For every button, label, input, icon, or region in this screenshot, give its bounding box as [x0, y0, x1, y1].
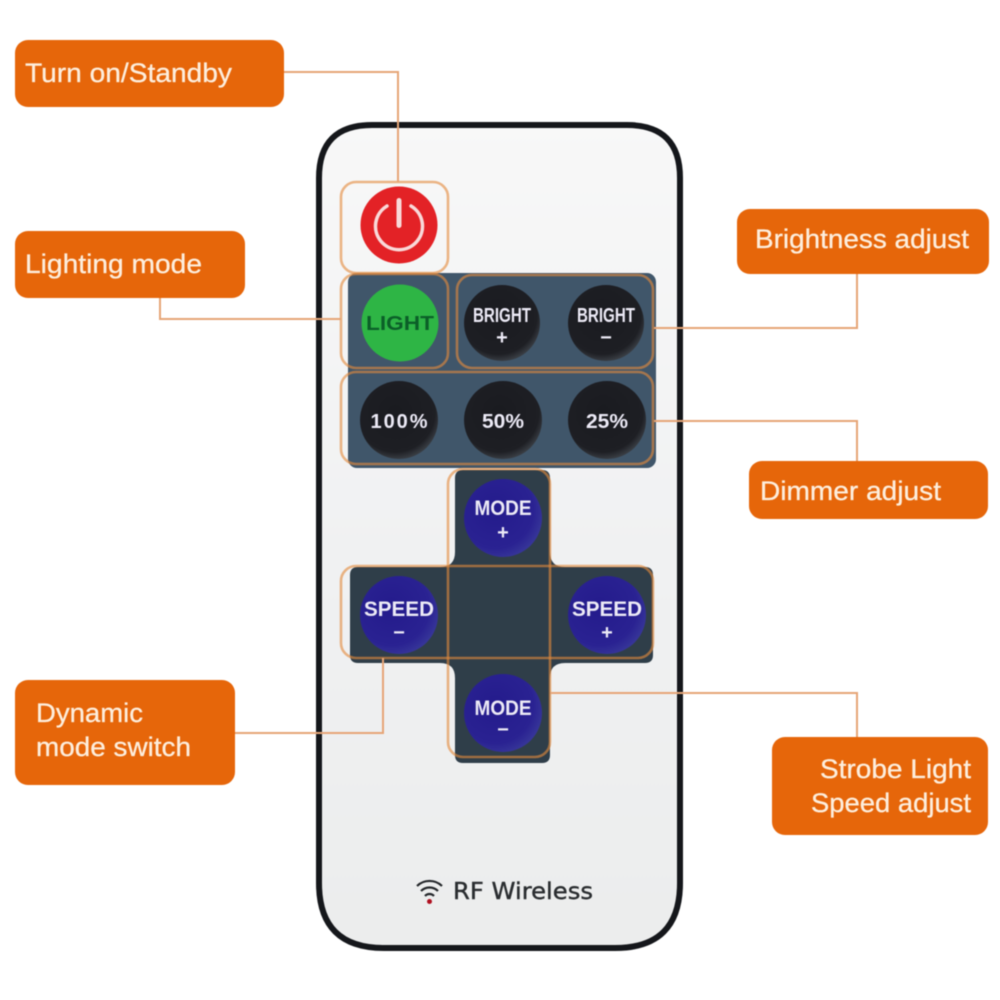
button: 50%: 50% — [482, 411, 524, 433]
button panel: cross pad — [350, 470, 653, 763]
button: light: LIGHT — [366, 313, 434, 335]
button: bright minus — [568, 285, 644, 361]
button: mode plus: MODE — [474, 497, 532, 520]
button: mode plus: + — [497, 522, 509, 544]
button: 50% — [464, 381, 542, 459]
icon: wireless signal — [417, 881, 442, 904]
button: bright minus: − — [600, 327, 612, 349]
button: bright plus: + — [496, 327, 508, 349]
button: bright plus: BRIGHT — [473, 305, 531, 327]
button: mode minus: MODE — [474, 697, 532, 720]
label: dimmer adjust: Dimmer adjust — [760, 476, 942, 506]
button: speed minus: SPEED — [364, 598, 434, 621]
label: turn on/standby — [15, 40, 284, 107]
label: strobe light speed adjust — [772, 737, 988, 835]
remote body — [319, 125, 680, 948]
button: speed minus: − — [393, 622, 405, 644]
button: light — [362, 284, 438, 362]
leader lines — [160, 72, 857, 737]
label: brightness adjust: Brightness adjust — [755, 224, 970, 254]
button: speed minus — [360, 576, 438, 654]
label: strobe light speed adjust: Strobe Light — [820, 754, 972, 784]
button: speed plus: + — [601, 622, 613, 644]
label: brightness adjust — [737, 209, 989, 274]
power button — [360, 186, 438, 264]
label: dynamic mode switch: mode switch — [36, 732, 191, 762]
label: dynamic mode switch: Dynamic — [36, 698, 143, 728]
label: dynamic mode switch — [15, 680, 235, 785]
label: strobe light speed adjust: Speed adjust — [811, 788, 972, 818]
button: 100%: 100% — [370, 411, 428, 433]
button: mode minus — [464, 674, 542, 752]
highlight outlines — [341, 182, 653, 757]
label: dimmer adjust — [749, 461, 988, 519]
button: 25% — [568, 381, 646, 459]
button: speed plus — [568, 576, 646, 654]
button: bright plus — [464, 285, 540, 361]
button: speed plus: SPEED — [572, 598, 642, 621]
label: turn on/standby: Turn on/Standby — [25, 58, 233, 88]
label: lighting mode — [15, 231, 245, 298]
label: lighting mode: Lighting mode — [25, 249, 202, 279]
button: 25%: 25% — [586, 411, 628, 433]
button: bright minus: BRIGHT — [577, 305, 635, 327]
button: mode plus — [464, 479, 542, 557]
button: mode minus: − — [497, 719, 509, 741]
button: 100% — [360, 381, 438, 459]
button panel: top rows — [348, 273, 656, 468]
brand text: RF Wireless — [453, 879, 593, 905]
